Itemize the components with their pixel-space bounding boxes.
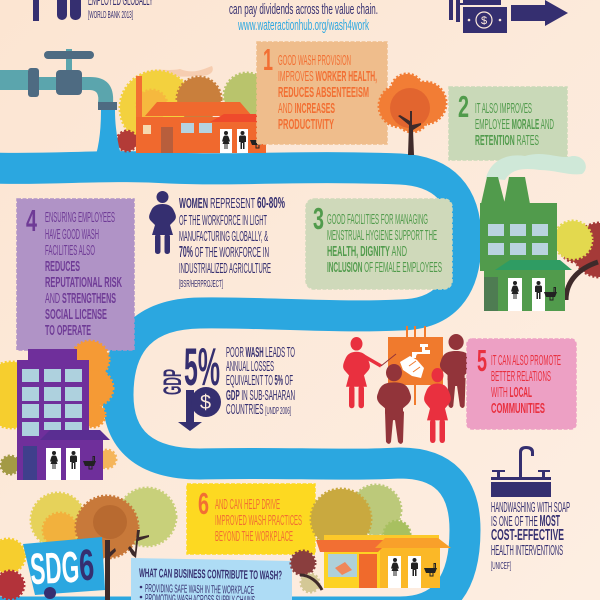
icon: GDP 5 percent down: $ — [200, 392, 211, 414]
panel: 3 menstrual hygiene — [306, 199, 452, 289]
panel: 4 reputational risk: REDUCES — [45, 259, 80, 275]
panel: 4 reputational risk: TO OPERATE — [45, 323, 91, 339]
text: GDP IN SUB-SAHARAN — [226, 388, 295, 404]
intro text — [229, 2, 378, 34]
panel: 5 local communities: 5 — [477, 343, 487, 378]
trees bottom left — [0, 488, 176, 600]
orange building with trees — [117, 66, 272, 153]
icon: community group with handwashing board — [343, 326, 472, 444]
icon: people legs — [33, 0, 81, 21]
text: MANUFACTURING GLOBALLY, & — [179, 229, 268, 245]
panel: 1 worker health — [257, 42, 387, 144]
panel: 4 reputational risk: 4 — [26, 203, 37, 238]
panel: 4 reputational risk: SOCIAL LICENSE — [45, 307, 107, 323]
panel: 2 morale — [449, 87, 567, 160]
handwashing text — [491, 500, 570, 572]
panel: 5 local communities: WITH LOCAL — [491, 385, 532, 401]
purple building with trees — [0, 341, 116, 480]
panel: 1 worker health: GOOD WASH PROVISION — [278, 53, 351, 69]
panel: what can business contribute — [131, 558, 292, 600]
top left statistic fragment — [33, 0, 153, 21]
text: 5% — [184, 338, 220, 397]
panel: 2 morale: RETENTION RATES — [475, 133, 539, 149]
GDP loss text: POOR WASH LEADS TO — [226, 345, 295, 361]
text: INDUSTRIALIZED AGRICULTURE — [179, 261, 271, 277]
women workforce text: WOMEN REPRESENT 60-80% — [179, 195, 285, 212]
panel: what can business contribute: WHAT CAN BUSINESS CONTRIBUTE TO WASH? — [139, 566, 282, 582]
intro text: can pay dividends across the value chain. — [229, 2, 378, 18]
panel: 4 reputational risk: ENSURING EMPLOYEES — [45, 210, 115, 226]
panel: 4 reputational risk: REPUTATIONAL RISK — [45, 275, 122, 291]
panel: 3 menstrual hygiene: 3 — [313, 201, 324, 236]
panel: 6 beyond the workplace — [187, 484, 315, 554]
icon: woman — [149, 191, 176, 254]
panel: 6 beyond the workplace: 6 — [198, 486, 209, 521]
green factory — [480, 154, 600, 311]
handwashing text: [UNICEF] — [491, 561, 511, 572]
water stream — [96, 110, 121, 155]
text: OF THE WORKFORCE IN LIGHT — [179, 213, 267, 229]
panel: 3 menstrual hygiene: INCLUSION OF FEMALE EMPLOYEES — [327, 260, 442, 276]
SDG6 badge: 6 — [78, 541, 95, 590]
icon: GDP 5 percent down — [159, 338, 221, 431]
panel: 1 worker health: REDUCES ABSENTEEISM — [278, 85, 369, 101]
link: www.wateractionhub.org/wash4work — [237, 18, 369, 34]
panel: 4 reputational risk: HAVE GOOD WASH — [45, 227, 99, 243]
panel: 1 worker health: IMPROVES WORKER HEALTH, — [278, 69, 377, 85]
icon: GDP 5 percent down: GDP — [159, 369, 187, 395]
source: world bank — [88, 0, 153, 21]
panel: 2 morale: 2 — [458, 89, 469, 124]
panel: 6 beyond the workplace: BEYOND THE WORKPLACE — [215, 529, 293, 545]
panel: 4 reputational risk — [17, 199, 134, 350]
orange tree — [379, 74, 446, 155]
SDG6 badge: SDG — [29, 543, 80, 594]
panel: 2 morale: EMPLOYEE MORALE AND — [475, 117, 554, 133]
GDP loss text: ANNUAL LOSSES — [226, 359, 274, 375]
source: world bank: [WORLD BANK 2013] — [88, 10, 133, 21]
GDP loss text — [226, 345, 295, 418]
panel: what can business contribute: PROVIDING SAFE WASH IN THE WORKPLACE — [145, 583, 254, 597]
panel: 5 local communities: COMMUNITIES — [491, 401, 545, 417]
panel: 1 worker health: 1 — [263, 42, 273, 77]
river — [0, 167, 466, 600]
panel: 1 worker health: PRODUCTIVITY — [278, 117, 334, 133]
panel: 3 menstrual hygiene: GOOD FACILITIES FOR MANAGING — [327, 212, 428, 228]
icon: sink — [491, 446, 551, 497]
text: MENSTRUAL HYGIENE SUPPORT THE — [327, 228, 437, 244]
icon: banknotes and arrow: $ — [481, 15, 487, 27]
SDG6 badge — [23, 537, 105, 599]
icon: banknotes and arrow — [449, 0, 568, 33]
panel: 5 local communities — [467, 339, 576, 429]
panel: 4 reputational risk: FACILITIES ALSO — [45, 243, 95, 259]
women workforce text: 70% OF THE WORKFORCE IN — [179, 244, 269, 261]
panel: 6 beyond the workplace: AND CAN HELP DRIVE — [215, 497, 280, 513]
GDP loss text: EQUIVALENT TO 5% OF — [226, 373, 293, 389]
panel: 1 worker health: AND INCREASES — [278, 101, 335, 117]
handwashing text: IS ONE OF THE MOST — [491, 513, 560, 530]
panel: 3 menstrual hygiene: HEALTH, DIGNITY AND — [327, 244, 407, 260]
text: IMPROVED WASH PRACTICES — [215, 513, 302, 529]
icon: water tap — [0, 49, 121, 155]
panel: 4 reputational risk: AND STRENGTHENS — [45, 291, 116, 307]
shop with trees — [291, 485, 451, 592]
women workforce text — [179, 195, 285, 290]
women workforce text: [BSR/HERPROJECT] — [179, 279, 223, 290]
GDP loss text: COUNTRIES [UNDP 2006] — [226, 402, 291, 418]
